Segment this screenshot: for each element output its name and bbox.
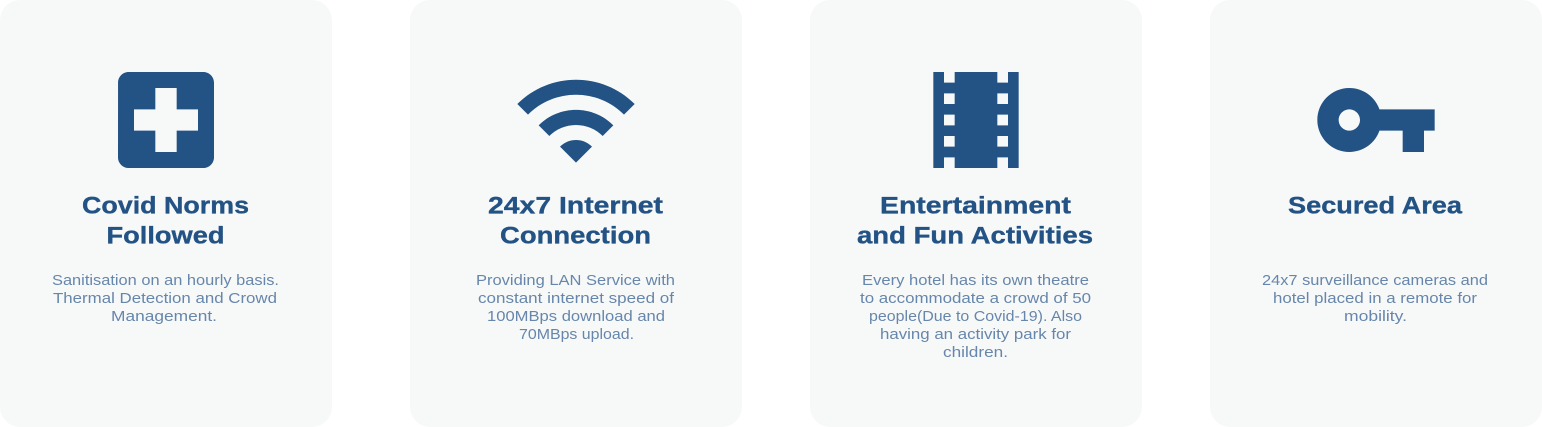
card background	[410, 0, 742, 427]
heading	[82, 192, 249, 250]
body text: 70MBps upload.	[519, 326, 634, 343]
body text: to accommodate a crowd of 50	[860, 290, 1091, 307]
body text: children.	[943, 344, 1008, 361]
panel: Secured area	[1210, 0, 1542, 427]
heading	[488, 192, 663, 250]
heading: Covid Norms	[82, 192, 249, 220]
card background	[0, 0, 332, 427]
panel: Entertainment	[810, 0, 1142, 427]
body text: 24x7 surveillance cameras and	[1262, 272, 1488, 289]
heading	[857, 192, 1093, 250]
icon: medical cross	[118, 72, 214, 168]
card background	[810, 0, 1142, 427]
heading: Followed	[106, 222, 224, 250]
body text: Providing LAN Service with	[476, 272, 675, 289]
icon: wifi	[517, 80, 635, 163]
body text: Management.	[111, 308, 217, 325]
body text	[860, 272, 1091, 361]
icon: key	[1317, 88, 1435, 152]
heading: and Fun Activities	[857, 222, 1093, 250]
body text: having an activity park for	[880, 326, 1071, 343]
heading: Entertainment	[880, 192, 1071, 220]
body text: constant internet speed of	[478, 290, 675, 307]
body text: people(Due to Covid-19). Also	[869, 308, 1082, 325]
icon: film strip	[933, 72, 1019, 168]
body text: Sanitisation on an hourly basis.	[52, 272, 279, 289]
heading: Connection	[500, 222, 651, 250]
panel: Covid norms	[0, 0, 332, 427]
body text: Thermal Detection and Crowd	[53, 290, 277, 307]
body text: Every hotel has its own theatre	[862, 272, 1089, 289]
body text: 100MBps download and	[487, 308, 665, 325]
body text	[52, 272, 279, 325]
body text: hotel placed in a remote for	[1273, 290, 1477, 307]
heading: 24x7 Internet	[488, 192, 663, 220]
body text	[1262, 272, 1488, 325]
heading: Secured Area	[1288, 192, 1462, 220]
card background	[1210, 0, 1542, 427]
body text	[476, 272, 675, 343]
body text: mobility.	[1344, 308, 1407, 325]
panel: Internet connection	[410, 0, 742, 427]
